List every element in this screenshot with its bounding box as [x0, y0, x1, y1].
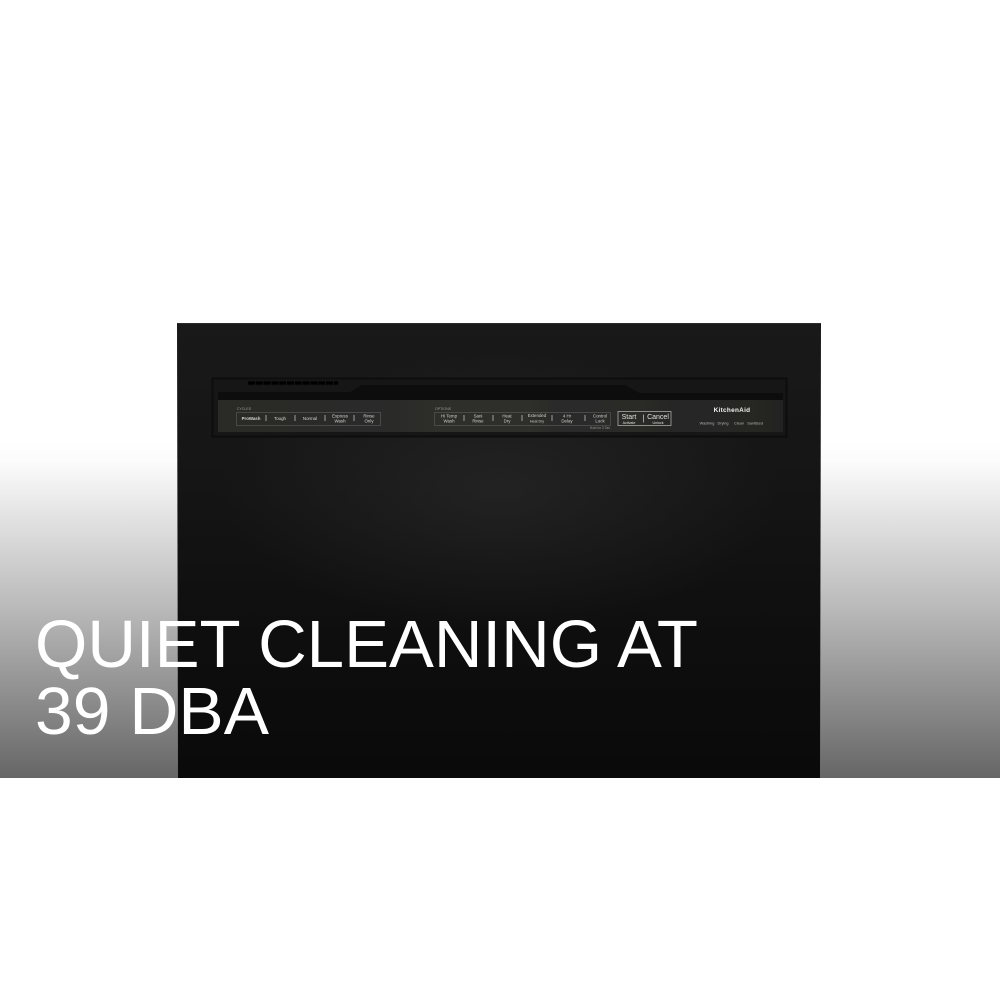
options group: 4 Hr: [563, 414, 572, 418]
control strip: [218, 400, 783, 432]
cycles group: Normal: [303, 416, 317, 421]
KitchenAid logo and status lights: [700, 407, 763, 426]
KitchenAid logo and status lights: KitchenAid: [714, 407, 750, 414]
options group: Delay: [561, 418, 573, 424]
headline: 39 DBA: [35, 674, 269, 749]
headline: QUIET CLEANING AT: [35, 607, 698, 682]
start and cancel buttons: Unlock: [652, 421, 664, 425]
vent slots: [248, 381, 338, 385]
options group: Heat: [502, 414, 512, 418]
options group: Hi Temp: [441, 414, 458, 418]
options group: Dry: [504, 418, 511, 424]
cycles group: Wash: [334, 418, 346, 424]
start and cancel buttons: Activate: [623, 421, 635, 425]
options group: Sani: [474, 414, 482, 418]
start and cancel buttons: Cancel: [647, 414, 669, 421]
options group: Extended: [528, 413, 547, 418]
options group: Hold for 3 Sec: [590, 426, 611, 430]
start and cancel buttons: Start: [622, 414, 636, 421]
options group: [434, 407, 611, 430]
cycles group: Express: [332, 414, 349, 418]
KitchenAid logo and status lights: Washing: [700, 422, 714, 426]
cycles group: Tough: [274, 416, 287, 421]
cycles group: [236, 407, 380, 426]
KitchenAid logo and status lights: Clean: [734, 422, 744, 426]
start and cancel buttons: [618, 412, 671, 426]
options group: Heat Dry: [530, 420, 544, 424]
cycles group: Only: [364, 418, 374, 424]
options group: Lock: [595, 418, 605, 424]
panel handle recess: [218, 385, 783, 400]
headline: [35, 607, 698, 749]
options group: OPTIONS: [435, 407, 452, 411]
dishwasher door: [177, 323, 821, 778]
cycles group: ProWash: [242, 416, 261, 421]
cycles group: CYCLES: [237, 407, 252, 411]
options group: Wash: [443, 418, 455, 424]
options group: Rinse: [472, 418, 484, 424]
KitchenAid logo and status lights: Sanitized: [747, 422, 763, 426]
KitchenAid logo and status lights: Drying: [718, 422, 728, 426]
options group: Control: [593, 414, 607, 418]
cycles group: Rinse: [363, 414, 375, 418]
control panel: [212, 378, 786, 436]
